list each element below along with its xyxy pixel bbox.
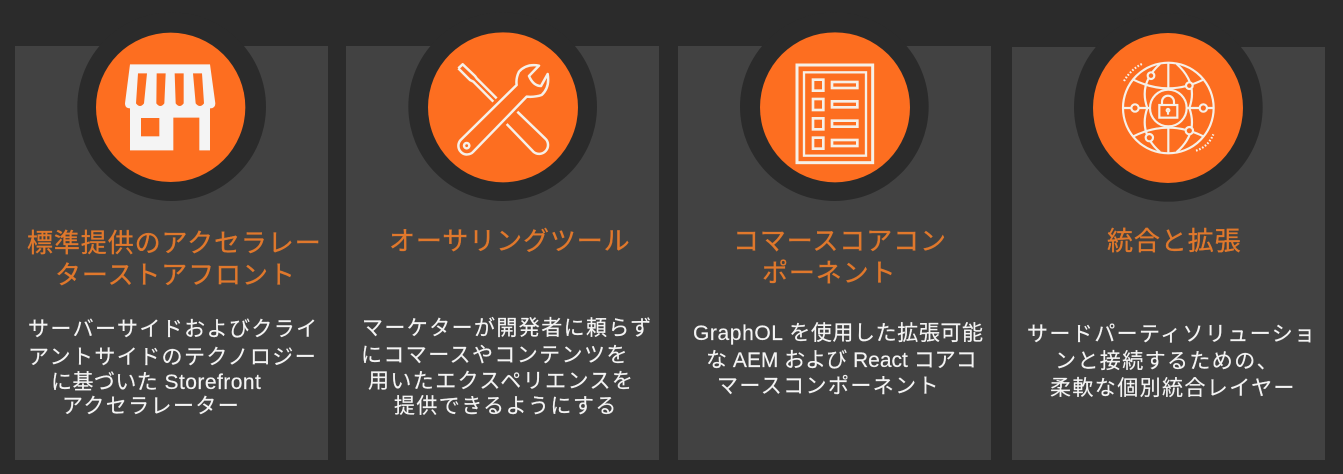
body text: サーバーサイドおよびクライ <box>28 318 319 341</box>
icon: wrench and screwdriver <box>408 32 597 201</box>
body text: 提供できるようにする <box>394 395 618 418</box>
panel: integration and extension <box>1012 33 1325 460</box>
heading: コマースコアコン <box>733 226 947 256</box>
body text: アントサイドのテクノロジー <box>28 346 317 369</box>
heading: オーサリングツール <box>389 226 631 256</box>
body text: ンと接続するための、 <box>1055 350 1279 373</box>
body text <box>361 316 653 418</box>
icon: storefront <box>77 32 266 201</box>
body text: GraphOL を使用した拡張可能 <box>693 322 984 345</box>
icon: secure globe <box>1074 33 1262 202</box>
body text: サードパーティソリューショ <box>1027 323 1317 346</box>
heading: 統合と拡張 <box>1107 226 1242 256</box>
body text: 柔軟な個別統合レイヤー <box>1050 377 1296 400</box>
body text: マーケターが開発者に頼らず <box>362 317 653 340</box>
heading <box>733 226 947 288</box>
body text <box>28 318 319 418</box>
body text <box>693 322 984 398</box>
panel: authoring tools <box>346 32 659 460</box>
body text: アクセラレーター <box>62 395 240 418</box>
heading <box>27 228 322 290</box>
panel: accelerator storefront <box>15 32 328 460</box>
heading: 標準提供のアクセラレー <box>27 228 322 258</box>
body text: な AEM および React コアコ <box>706 349 977 372</box>
heading: ターストアフロント <box>55 260 296 290</box>
icon: checklist <box>740 32 928 201</box>
body text: に基づいた Storefront <box>51 371 261 394</box>
heading: ポーネント <box>762 258 897 288</box>
body text <box>1027 323 1317 400</box>
body text: マースコンポーネント <box>717 375 940 398</box>
body text: 用いたエクスペリエンスを <box>368 370 634 393</box>
body text: にコマースやコンテンツを <box>361 344 629 367</box>
panel: commerce core components <box>678 32 991 460</box>
